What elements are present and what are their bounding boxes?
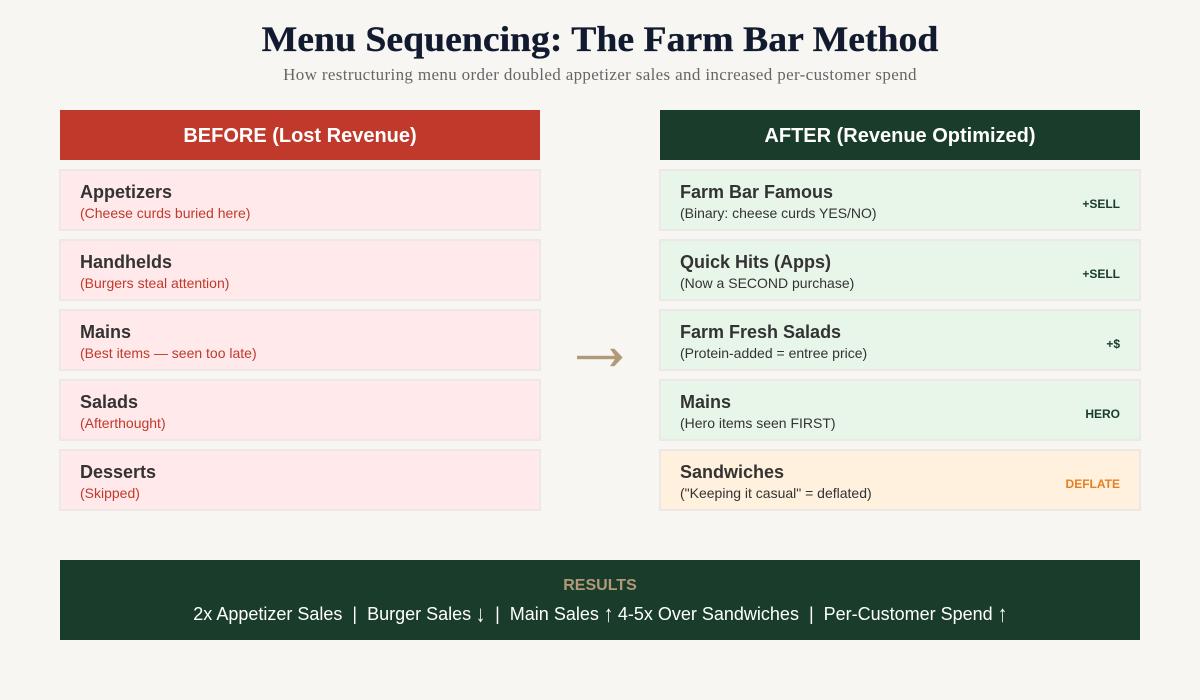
after card: mains: (Hero items seen FIRST) [680, 415, 836, 431]
after card: mains: HERO [1085, 407, 1120, 421]
before card: handhelds: (Burgers steal attention) [80, 275, 229, 291]
before card: mains: Mains [80, 322, 131, 342]
before card: salads: (Afterthought) [80, 415, 166, 431]
after card: sandwiches [659, 449, 1141, 511]
after card: quick hits: +SELL [1082, 267, 1120, 281]
results text: ↑ [997, 601, 1007, 627]
after card: farm fresh salads [659, 309, 1141, 371]
before card: handhelds [59, 239, 541, 301]
title: Menu Sequencing: The Farm Bar Method [262, 19, 938, 59]
after card: mains [659, 379, 1141, 441]
results banner [60, 560, 1140, 640]
arrow [577, 348, 623, 366]
before card: appetizers: Appetizers [80, 182, 172, 202]
before card: appetizers: (Cheese curds buried here) [80, 205, 250, 221]
before header [60, 110, 540, 160]
after card: farm bar famous [659, 169, 1141, 231]
after card: farm fresh salads: (Protein-added = entree price) [680, 345, 867, 361]
results text: ↓ [476, 601, 485, 627]
after card: sandwiches: Sandwiches [680, 462, 784, 482]
subtitle: How restructuring menu order doubled appetizer sales and increased per-customer spend [283, 65, 917, 84]
after card: farm fresh salads: Farm Fresh Salads [680, 322, 841, 342]
after card: sandwiches: DEFLATE [1066, 477, 1120, 491]
before header: BEFORE (Lost Revenue) [183, 125, 417, 147]
before card: desserts: Desserts [80, 462, 156, 482]
after card: sandwiches: ("Keeping it casual" = deflated) [680, 485, 872, 501]
results text: ↑ [604, 601, 613, 627]
before card: desserts [59, 449, 541, 511]
after card: farm fresh salads: +$ [1106, 337, 1120, 351]
after card: farm bar famous: (Binary: cheese curds YES/NO) [680, 205, 877, 221]
before card: salads: Salads [80, 392, 138, 412]
after header [660, 110, 1140, 160]
before card: desserts: (Skipped) [80, 485, 140, 501]
after header: AFTER (Revenue Optimized) [764, 125, 1036, 147]
before card: mains: (Best items — seen too late) [80, 345, 257, 361]
before card: handhelds: Handhelds [80, 252, 172, 272]
after card: farm bar famous: Farm Bar Famous [680, 182, 833, 202]
results label: RESULTS [563, 577, 637, 594]
before card: mains [59, 309, 541, 371]
before card: appetizers [59, 169, 541, 231]
after card: mains: Mains [680, 392, 731, 412]
before card: salads [59, 379, 541, 441]
after card: farm bar famous: +SELL [1082, 197, 1120, 211]
results text: 2x Appetizer Sales | Burger Sales | Main Sales 4-5x Over Sandwiches | Per-Customer Spend [193, 604, 993, 624]
after card: quick hits [659, 239, 1141, 301]
after card: quick hits: Quick Hits (Apps) [680, 252, 831, 272]
after card: quick hits: (Now a SECOND purchase) [680, 275, 854, 291]
